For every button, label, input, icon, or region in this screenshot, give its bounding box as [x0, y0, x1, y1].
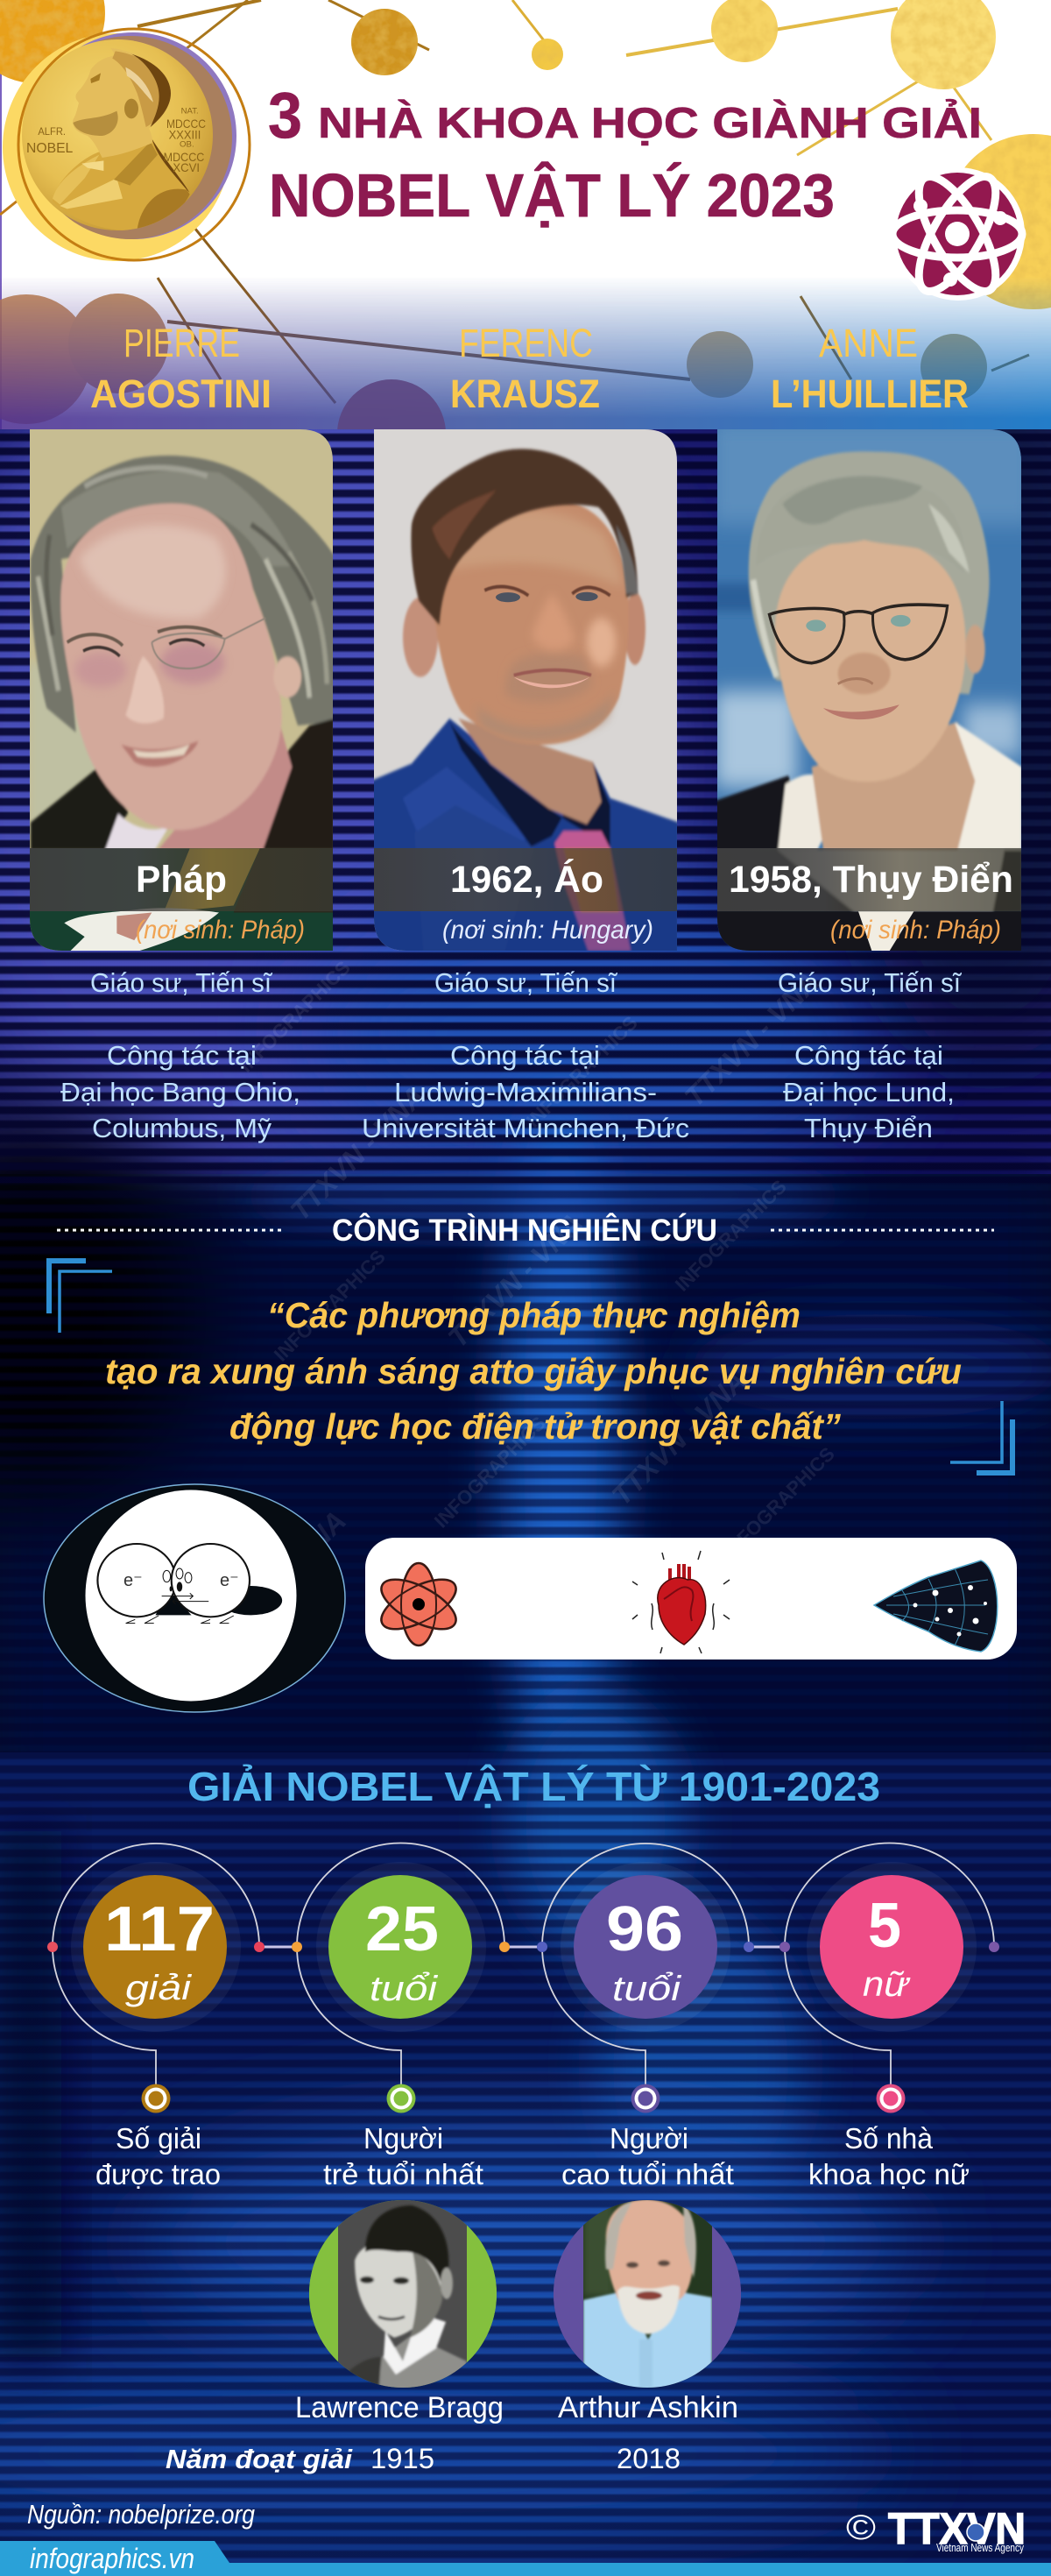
- stat: 25 years youngest: Người: [363, 2122, 443, 2155]
- name: Ferenc Krausz: FERENC: [459, 321, 593, 365]
- watermarks: TTXVN - VNA: [678, 966, 825, 1113]
- text: Pháp birth info: (nơi sinh: Pháp): [136, 916, 305, 945]
- title: [268, 79, 982, 230]
- stat: 117 prizes: được trao: [95, 2158, 221, 2190]
- logo: TTXVN: TTXVN: [888, 2504, 1026, 2553]
- quote: research title: [105, 1295, 962, 1447]
- scientist names: [90, 321, 969, 416]
- stat: 117 prizes: [47, 1844, 265, 2190]
- stat: 5 women: Số nhà: [844, 2122, 934, 2155]
- text: 1962, Áo birth info: (nơi sinh: Hungary): [442, 916, 653, 945]
- stat: 96 years oldest: tuổi: [612, 1970, 681, 2008]
- logo: TTXVN: Vietnam News Agency: [936, 2541, 1024, 2554]
- portrait: Lawrence Bragg: [295, 2190, 504, 2424]
- text: 1958, Thụy Điển birth info: (nơi sinh: Pháp): [830, 916, 1001, 945]
- stat: 25 years youngest: tuổi: [370, 1970, 438, 2008]
- quote: research title: tạo ra xung ánh sáng atto giây phục vụ nghiên cứu: [105, 1351, 962, 1391]
- watermarks: TTXVN - VNA: [441, 1207, 589, 1354]
- stat: 96 years oldest: cao tuổi nhất: [561, 2158, 734, 2190]
- stat: 96 years oldest: 96: [606, 1894, 683, 1964]
- connectors between statistics: [259, 1945, 785, 1949]
- lower clothing under banner: [29, 848, 335, 954]
- watermarks: INFOGRAPHICS: [719, 1443, 839, 1563]
- stat: 5 women: nữ: [863, 1965, 911, 2004]
- text: L'Huillier titles: Đại học Lund,: [783, 1077, 955, 1108]
- stat: 5 women: [779, 1844, 999, 2190]
- text: L'Huillier titles: Công tác tại: [794, 1040, 943, 1071]
- icon: Nobel medal: MDCCC: [164, 150, 204, 164]
- title: NHÀ KHOA HỌC GIÀNH GIẢI: [318, 99, 982, 147]
- icon: Nobel medal: OB.: [180, 139, 194, 148]
- name: Anne L'Huillier: [771, 321, 969, 416]
- icon: expanding universe: [874, 1560, 998, 1652]
- icon: Nobel medal: XCVI: [173, 160, 200, 174]
- text: Agostini titles: Giáo sư, Tiến sĩ: [90, 967, 272, 998]
- text: Agostini titles: Columbus, Mỹ: [92, 1113, 272, 1143]
- stat: 96 years oldest: Người: [610, 2122, 688, 2155]
- source credit: Nguồn: nobelprize.org: [27, 2499, 255, 2530]
- text: Agostini titles: Công tác tại: [107, 1040, 257, 1071]
- text: Pháp birth info: Pháp: [136, 859, 227, 901]
- stat: 117 prizes: 117: [104, 1894, 215, 1964]
- icon: beating heart: [632, 1551, 730, 1653]
- icon: Nobel medal: ALFR.: [38, 125, 66, 138]
- portrait: Arthur Ashkin: [552, 2190, 744, 2424]
- faded spheres in gradient band: [0, 294, 987, 424]
- brackets around quote: [49, 1261, 1012, 1473]
- watermarks: [205, 957, 839, 1652]
- panel: portrait Pierre Agostini: [30, 429, 333, 951]
- text: L'Huillier titles: Giáo sư, Tiến sĩ: [778, 967, 962, 998]
- banner: 1962, Áo: [374, 848, 677, 911]
- text: Krausz titles: [362, 967, 689, 1143]
- text: L'Huillier titles: [778, 967, 962, 1143]
- header panel: white background and gradient band: [0, 0, 1051, 429]
- name: Ferenc Krausz: [450, 321, 600, 416]
- icon: Nobel medal: NAT.: [181, 106, 199, 115]
- text: 1958, Thụy Điển birth info: 1958, Thụy Điển: [729, 859, 1013, 901]
- title: NOBEL VẬT LÝ 2023: [269, 160, 835, 230]
- watermarks: INFOGRAPHICS: [671, 1176, 791, 1296]
- text: L'Huillier titles: Thụy Điển: [804, 1113, 933, 1143]
- icon: atom: [374, 1563, 463, 1645]
- name: Ferenc Krausz: KRAUSZ: [450, 372, 600, 416]
- name: Anne L'Huillier: ANNE: [819, 321, 918, 365]
- illustration: electrons in white circle: e⁻: [220, 1571, 239, 1590]
- stat: 117 prizes: Số giải: [116, 2122, 201, 2155]
- footer bar with site name: [0, 2541, 1051, 2576]
- row: award years: 1915: [370, 2443, 434, 2474]
- quote: research title: “Các phương pháp thực nghiệm: [267, 1295, 801, 1335]
- text: Krausz titles: Universität München, Đức: [362, 1113, 689, 1143]
- watermarks: TTXVN - VNA: [284, 1079, 431, 1227]
- watermarks: INFOGRAPHICS: [522, 1012, 642, 1132]
- icon: Nobel medal: XXXIII: [169, 128, 201, 142]
- heading: Nobel physics statistics: GIẢI NOBEL VẬT LÝ TỪ 1901-2023: [187, 1764, 880, 1809]
- name: Pierre Agostini: PIERRE: [123, 321, 240, 365]
- stat: 25 years youngest: trẻ tuổi nhất: [323, 2158, 483, 2190]
- decorative gold spheres and connecting lines: [0, 0, 1051, 403]
- text: Krausz titles: Ludwig-Maximilians-: [394, 1077, 657, 1108]
- text: 1958, Thụy Điển birth info: [729, 859, 1013, 945]
- text: Agostini titles: [60, 967, 300, 1143]
- panel: portrait Ferenc Krausz: [374, 429, 677, 951]
- gradient band behind the names: [0, 276, 1051, 434]
- icon: Nobel medal: MDCCC: [166, 117, 206, 131]
- portrait: Lawrence Bragg: Lawrence Bragg: [295, 2391, 504, 2424]
- illustration: electrons in white circle: [44, 1484, 345, 1712]
- text: Pháp birth info: [136, 859, 305, 945]
- name: Pierre Agostini: [90, 321, 272, 416]
- hair backing: [749, 451, 990, 694]
- logo: TTXVN: ©: [846, 2509, 876, 2547]
- title: 3: [268, 79, 302, 152]
- name: Pierre Agostini: AGOSTINI: [90, 372, 272, 416]
- illustration: electrons in white circle: e⁻: [123, 1571, 143, 1590]
- banner: Pháp: [30, 848, 333, 911]
- text: Krausz titles: Công tác tại: [450, 1040, 600, 1071]
- quote: research title: động lực học điện tử trong vật chất”: [229, 1406, 841, 1447]
- text: 1962, Áo birth info: [442, 859, 653, 945]
- portrait: Arthur Ashkin: Arthur Ashkin: [558, 2391, 738, 2424]
- row: award years: [166, 2443, 681, 2474]
- watermarks: TTXVN - VNA: [605, 1364, 752, 1511]
- panel: portrait Anne L'Huillier: [701, 421, 1033, 961]
- stat: 5 women: khoa học nữ: [808, 2158, 970, 2190]
- watermarks: INFOGRAPHICS: [235, 957, 355, 1077]
- row: award years: 2018: [617, 2443, 681, 2474]
- watermarks: INFOGRAPHICS: [270, 1246, 390, 1366]
- stat: 96 years oldest: [537, 1844, 754, 2190]
- watermarks: TTXVN - VNA: [205, 1504, 352, 1652]
- stat: 25 years youngest: [292, 1844, 510, 2190]
- row: award years: Năm đoạt giải: [166, 2444, 353, 2474]
- panel: atom, heart and universe: [365, 1538, 1017, 1660]
- icon: Nobel medal: [3, 29, 250, 261]
- text: Agostini titles: Đại học Bang Ohio,: [60, 1077, 300, 1108]
- text: Krausz titles: Giáo sư, Tiến sĩ: [434, 967, 617, 998]
- watermarks: INFOGRAPHICS: [430, 1412, 550, 1532]
- stat: 117 prizes: giải: [125, 1969, 192, 2007]
- footer bar with site name: infographics.vn: [30, 2543, 194, 2574]
- text: 1962, Áo birth info: 1962, Áo: [450, 859, 603, 901]
- stat: 25 years youngest: 25: [365, 1894, 439, 1964]
- banner: 1958, Thụy Điển: [717, 848, 1021, 911]
- heading: research work: CÔNG TRÌNH NGHIÊN CỨU: [332, 1213, 717, 1248]
- icon: Nobel medal: NOBEL: [26, 141, 73, 156]
- stat: 5 women: 5: [868, 1891, 901, 1961]
- name: Anne L'Huillier: L’HUILLIER: [771, 372, 969, 416]
- icon: atom badge: [892, 166, 1025, 302]
